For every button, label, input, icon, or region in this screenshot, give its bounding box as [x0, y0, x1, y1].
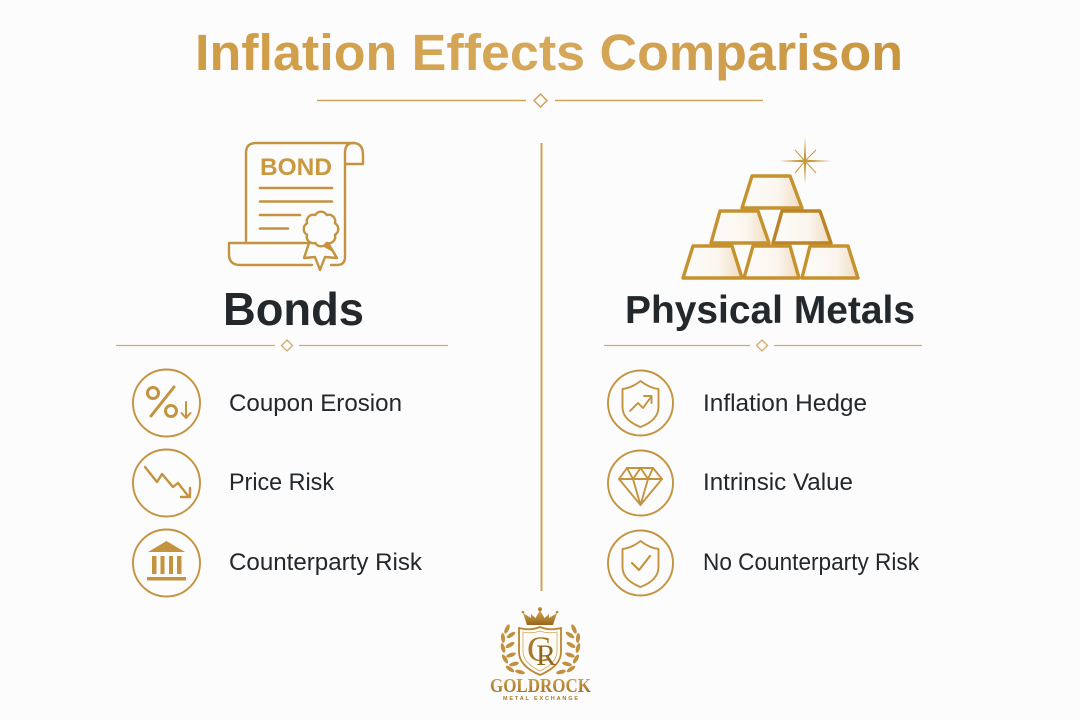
- item: Inflation Hedge: [608, 370, 867, 436]
- panel: bonds: [116, 143, 448, 596]
- icon: diamond: [608, 450, 673, 516]
- heading: Bonds: Bonds: [223, 283, 364, 335]
- icon: gold bars: [683, 137, 858, 278]
- icon label: BOND: BOND: [260, 154, 332, 181]
- tagline: METAL EXCHANGE: [503, 696, 578, 702]
- title: Inflation Effects Comparison: [195, 24, 903, 81]
- metals divider: [604, 340, 922, 351]
- shield: [519, 627, 561, 675]
- title divider: [317, 94, 763, 107]
- label: Coupon Erosion: [229, 390, 402, 417]
- icon: falling chart: [133, 450, 200, 516]
- icon: shield with check: [608, 530, 673, 596]
- label: Inflation Hedge: [703, 390, 867, 417]
- panel: physical metals: [604, 137, 922, 596]
- bonds divider: [116, 340, 448, 351]
- label: Price Risk: [229, 469, 335, 496]
- sparkle: [779, 137, 831, 184]
- icon: shield with rising chart: [608, 370, 673, 436]
- crown: [522, 607, 558, 625]
- item: Counterparty Risk: [133, 530, 423, 596]
- monogram C: C: [527, 629, 551, 669]
- item: Price Risk: [133, 450, 335, 516]
- monogram R: R: [536, 639, 556, 672]
- label: Counterparty Risk: [229, 549, 423, 576]
- icon: bank: [133, 530, 200, 596]
- label: No Counterparty Risk: [703, 549, 920, 576]
- item: Coupon Erosion: [133, 370, 402, 436]
- right laurel: [556, 624, 581, 675]
- label: Intrinsic Value: [703, 469, 853, 496]
- logo: Goldrock Metal Exchange: [490, 607, 591, 702]
- icon: bond scroll: [229, 143, 363, 270]
- left laurel: [500, 624, 525, 675]
- item: Intrinsic Value: [608, 450, 853, 516]
- wordmark: GOLDROCK: [490, 675, 591, 697]
- item: No Counterparty Risk: [608, 530, 920, 596]
- heading: Physical Metals: Physical Metals: [625, 289, 915, 332]
- icon: percent down: [133, 370, 200, 436]
- inner shield line: [523, 631, 557, 671]
- centre divider: [540, 143, 542, 591]
